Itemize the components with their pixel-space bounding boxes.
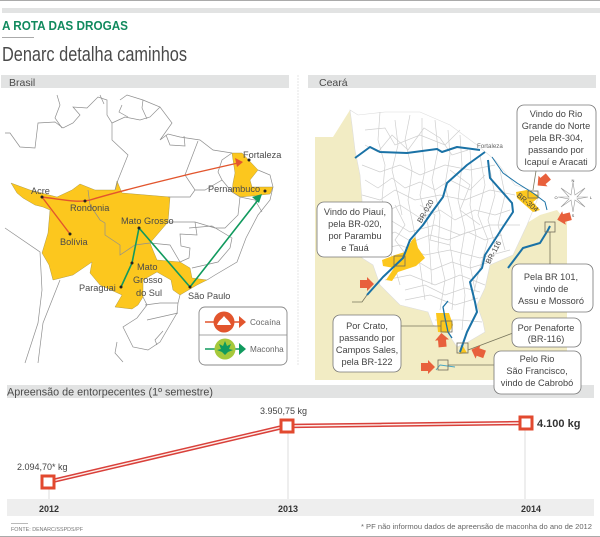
arrow: cocaine routes xyxy=(42,158,243,234)
callout: Piauí: e Tauá xyxy=(341,243,370,253)
map labels: Fortaleza xyxy=(243,150,282,160)
chart line xyxy=(48,423,526,482)
map: compass rose: L xyxy=(590,195,593,200)
panel heading: Ceará: Ceará xyxy=(319,77,348,89)
map labels: do Sul xyxy=(136,288,162,298)
map labels: Fortaleza and highways: Fortaleza xyxy=(477,143,503,150)
chart axis band with years: 2013 xyxy=(278,504,298,514)
callout: São Francisco xyxy=(494,351,581,394)
map: city markers xyxy=(40,158,266,288)
callout: Piauí: por Parambu xyxy=(328,231,382,241)
panel heading: Ceará xyxy=(308,75,596,89)
data point: 2012: 2.094,70* kg xyxy=(17,462,68,472)
map: compass rose xyxy=(554,178,593,218)
footnote: * PF não informou dados de apreensão de maconha do ano de 2012 xyxy=(361,522,592,531)
source: FONTE: DENARC/SSPDS/PF xyxy=(11,527,84,533)
title: A rota das drogas: A ROTA DAS DROGAS xyxy=(2,19,128,33)
callout: Rio Grande do Norte: passando por xyxy=(528,145,584,155)
map labels: Paraguai xyxy=(79,283,116,293)
map: neighbouring states in beige xyxy=(315,110,567,380)
map: highway routes xyxy=(355,147,550,370)
chart heading: Apreensão de entorpecentes (1º semestre) xyxy=(7,386,213,398)
panel: Ceará map xyxy=(308,75,596,380)
legend item: Maconha: Maconha xyxy=(250,345,284,354)
panel heading: Brasil xyxy=(1,75,289,89)
callout: Penaforte: Por Penaforte xyxy=(518,323,574,333)
chart axis band with years: 2014 xyxy=(521,504,541,514)
map labels: São Paulo xyxy=(188,291,230,301)
data point: 2014: 4.100 kg xyxy=(537,418,580,430)
data point: 2013 xyxy=(260,406,307,432)
callout: BR 101: Pela BR 101, xyxy=(524,272,578,282)
callout: Piauí xyxy=(317,202,392,257)
map: highlighted drug entry areas xyxy=(382,190,540,354)
map: Ceará state xyxy=(350,110,540,347)
callout: Penaforte xyxy=(512,318,581,347)
callout: Piauí: Vindo do Piauí, xyxy=(324,207,386,217)
callout: Rio Grande do Norte: Grande do Norte xyxy=(522,121,590,131)
callout: BR 101: vindo de xyxy=(534,284,568,294)
callout: São Francisco: Pelo Rio xyxy=(520,354,554,364)
map labels: Fortaleza and highways: BR-304 xyxy=(515,191,540,214)
heading: Denarc detalha caminhos: Denarc detalha caminhos xyxy=(2,44,187,66)
chart axis band with years: 2012 xyxy=(39,504,59,514)
callout: Rio Grande do Norte: pela BR-304, xyxy=(529,133,583,143)
data point: 2012 xyxy=(17,462,68,488)
panel: Brasil map xyxy=(1,75,289,365)
map: compass rose: N xyxy=(572,178,575,183)
map labels: Fortaleza and highways: BR-116 xyxy=(484,239,503,265)
callout: Rio Grande do Norte: Icapuí e Aracati xyxy=(524,157,588,167)
callout: Crato xyxy=(333,315,401,372)
map: Brazil and neighbouring borders xyxy=(5,95,273,363)
callout: Crato: Por Crato, xyxy=(346,321,388,331)
map: compass rose: S xyxy=(572,213,575,218)
callout: Penaforte: (BR-116) xyxy=(528,334,564,344)
callout: Piauí: pela BR-020, xyxy=(328,219,382,229)
map labels: Bolívia xyxy=(60,237,88,247)
map labels: Fortaleza and highways xyxy=(415,143,540,265)
map labels: Acre xyxy=(31,186,50,196)
map labels: Mato xyxy=(137,262,157,272)
map labels: Grosso xyxy=(133,275,163,285)
chart axis band with years xyxy=(7,499,594,516)
callout: São Francisco: vindo de Cabrobó xyxy=(501,378,573,388)
map: red entry arrows xyxy=(360,171,573,374)
map labels: Mato Grosso xyxy=(121,216,174,226)
map labels: Pernambuco xyxy=(208,184,260,194)
map labels xyxy=(31,150,282,301)
callout: Crato: pela BR-122 xyxy=(341,357,393,367)
map: highlighted states in yellow xyxy=(11,153,273,309)
map: compass rose: O xyxy=(554,195,558,200)
map: callout leaders and markers xyxy=(352,171,555,370)
panel heading: Brasil: Brasil xyxy=(9,77,35,89)
callout: São Francisco: São Francisco, xyxy=(506,366,568,376)
callout: BR 101 xyxy=(512,264,593,312)
callout: Crato: Campos Sales, xyxy=(336,345,398,355)
callout: BR 101: Assu e Mossoró xyxy=(518,296,584,306)
callout: Crato: passando por xyxy=(339,333,395,343)
panel: seizure line chart xyxy=(7,351,594,516)
legend: drug routes xyxy=(199,307,287,365)
callout: Rio Grande do Norte: Vindo do Rio xyxy=(530,109,582,119)
map: municipal borders xyxy=(362,112,520,330)
legend item: Cocaína: Cocaína xyxy=(250,318,281,327)
callout: Rio Grande do Norte xyxy=(517,105,596,171)
map labels: Fortaleza and highways: BR-020 xyxy=(415,198,436,225)
chart heading xyxy=(7,385,594,398)
map labels: Rondonia xyxy=(70,203,110,213)
arrow: marijuana routes xyxy=(121,194,262,287)
data point: 2014 xyxy=(520,417,580,430)
data point: 2013: 3.950,75 kg xyxy=(260,406,307,416)
